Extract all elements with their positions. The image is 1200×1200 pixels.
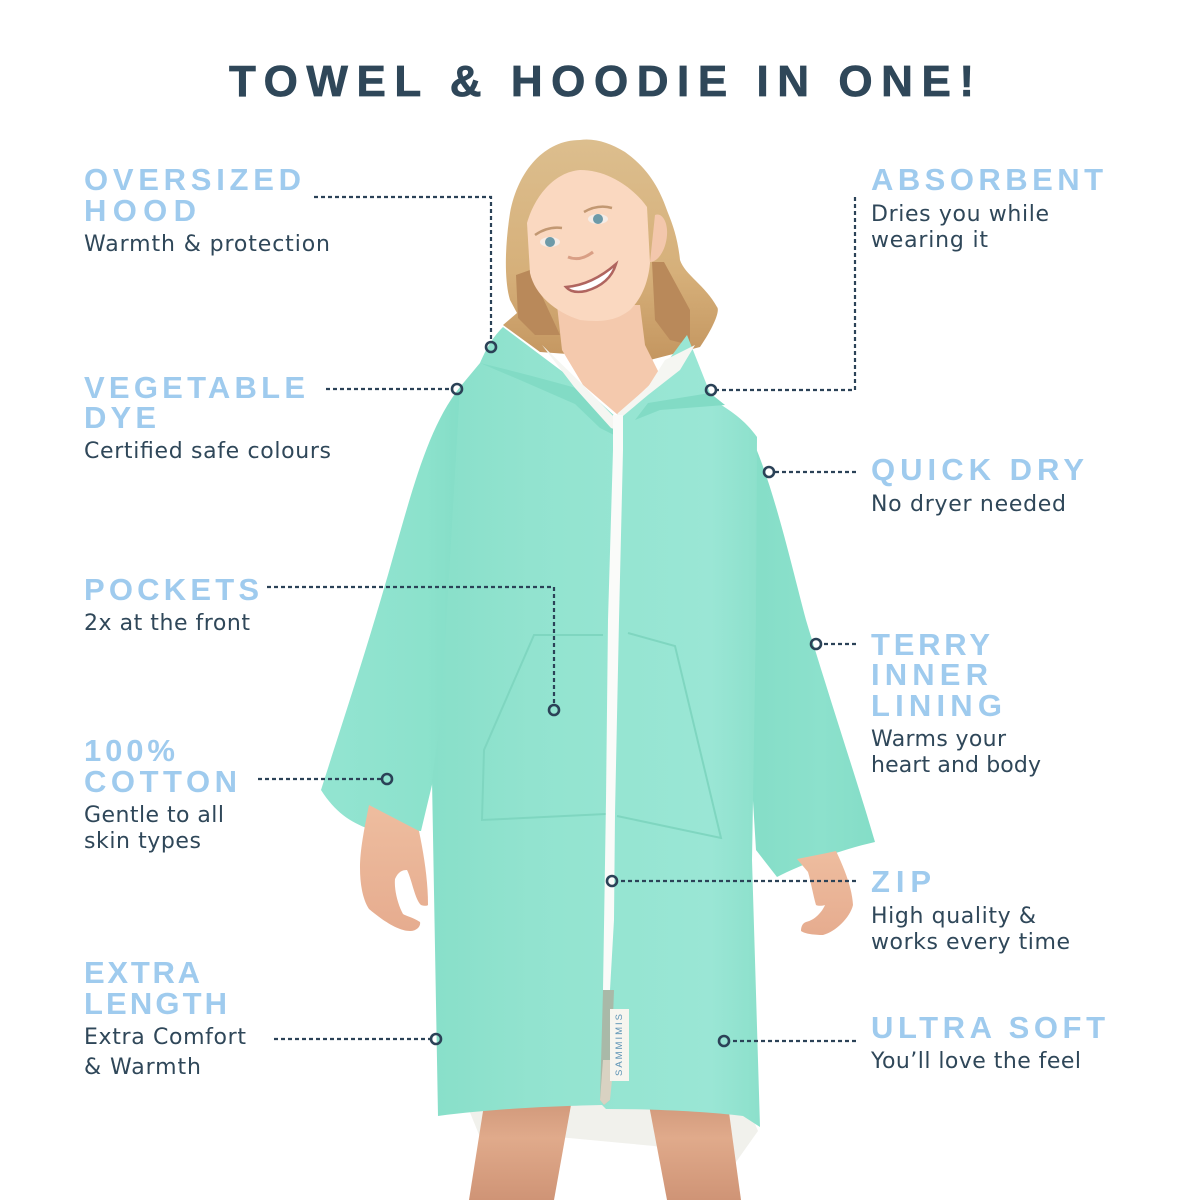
- callout: vegetable dye: DYE: [84, 400, 156, 435]
- callout: extra length: Extra Comfort: [84, 1025, 246, 1050]
- callout: 100% cotton: COTTON: [84, 764, 237, 799]
- callout: pockets: 2x at the front: [84, 611, 250, 636]
- right hand: [797, 851, 853, 935]
- illustration: child wearing hooded towel robe: [321, 140, 875, 1200]
- callout: quick dry: No dryer needed: [871, 492, 1066, 517]
- callout: extra length: & Warmth: [84, 1055, 201, 1080]
- callout: extra length: EXTRA: [84, 955, 200, 990]
- left sleeve: [321, 387, 470, 831]
- callout: quick dry: QUICK DRY: [871, 452, 1084, 487]
- hair: [503, 140, 718, 360]
- callout: oversized hood: HOOD: [84, 193, 196, 228]
- hem split: [600, 990, 614, 1105]
- callout: 100% cotton: Gentle to all: [84, 803, 224, 828]
- callout: absorbent: wearing it: [871, 228, 988, 253]
- callout: oversized hood: Warmth & protection: [84, 232, 330, 257]
- robe tag: SAMMIMIS: [614, 1014, 625, 1076]
- callout: absorbent: [706, 162, 1103, 395]
- callout: zip: High quality &: [871, 904, 1036, 929]
- face: [527, 170, 667, 321]
- robe tag: [610, 1009, 629, 1081]
- callout: zip: ZIP: [871, 864, 931, 899]
- pockets: [482, 633, 721, 838]
- callout: vegetable dye: Certified safe colours: [84, 439, 331, 464]
- callout: oversized hood: OVERSIZED: [84, 162, 301, 197]
- callout: pockets: [84, 572, 559, 715]
- title: TOWEL & HOODIE IN ONE!: [229, 57, 974, 106]
- callout: terry inner lining: LINING: [871, 688, 1002, 723]
- hood shading: [480, 363, 725, 436]
- neck: [557, 305, 660, 415]
- callout: 100% cotton: [84, 733, 392, 854]
- callout: extra length: LENGTH: [84, 986, 227, 1021]
- callout: pockets: POCKETS: [84, 572, 259, 607]
- callout: vegetable dye: [84, 370, 462, 464]
- callout: terry inner lining: [811, 627, 1041, 778]
- callout: ultra soft: You’ll love the feel: [870, 1049, 1081, 1074]
- darker hair below face: [516, 262, 690, 345]
- callout: absorbent: ABSORBENT: [871, 162, 1103, 197]
- robe body: [432, 327, 760, 1127]
- callout: quick dry: [764, 452, 1084, 517]
- callout: ultra soft: ULTRA SOFT: [871, 1010, 1105, 1045]
- callout: oversized hood: [84, 162, 496, 352]
- callout: 100% cotton: 100%: [84, 733, 175, 768]
- callout: extra length: [84, 955, 441, 1080]
- robe white lining at hem: [469, 1100, 758, 1162]
- callout: 100% cotton: skin types: [84, 829, 201, 854]
- callout: terry inner lining: INNER: [871, 657, 988, 692]
- left hand: [360, 805, 428, 931]
- callout: vegetable dye: VEGETABLE: [84, 370, 305, 405]
- legs: [469, 1105, 741, 1200]
- callout: terry inner lining: heart and body: [871, 753, 1041, 778]
- hood inner lining: [542, 345, 695, 432]
- callout: absorbent: Dries you while: [871, 202, 1049, 227]
- callout: ultra soft: [719, 1010, 1105, 1074]
- callout: terry inner lining: Warms your: [871, 727, 1007, 752]
- callout: zip: works every time: [871, 930, 1070, 955]
- callout: zip: [607, 864, 1070, 955]
- right sleeve: [742, 425, 875, 877]
- zip: [603, 415, 623, 990]
- callout: terry inner lining: TERRY: [871, 627, 990, 662]
